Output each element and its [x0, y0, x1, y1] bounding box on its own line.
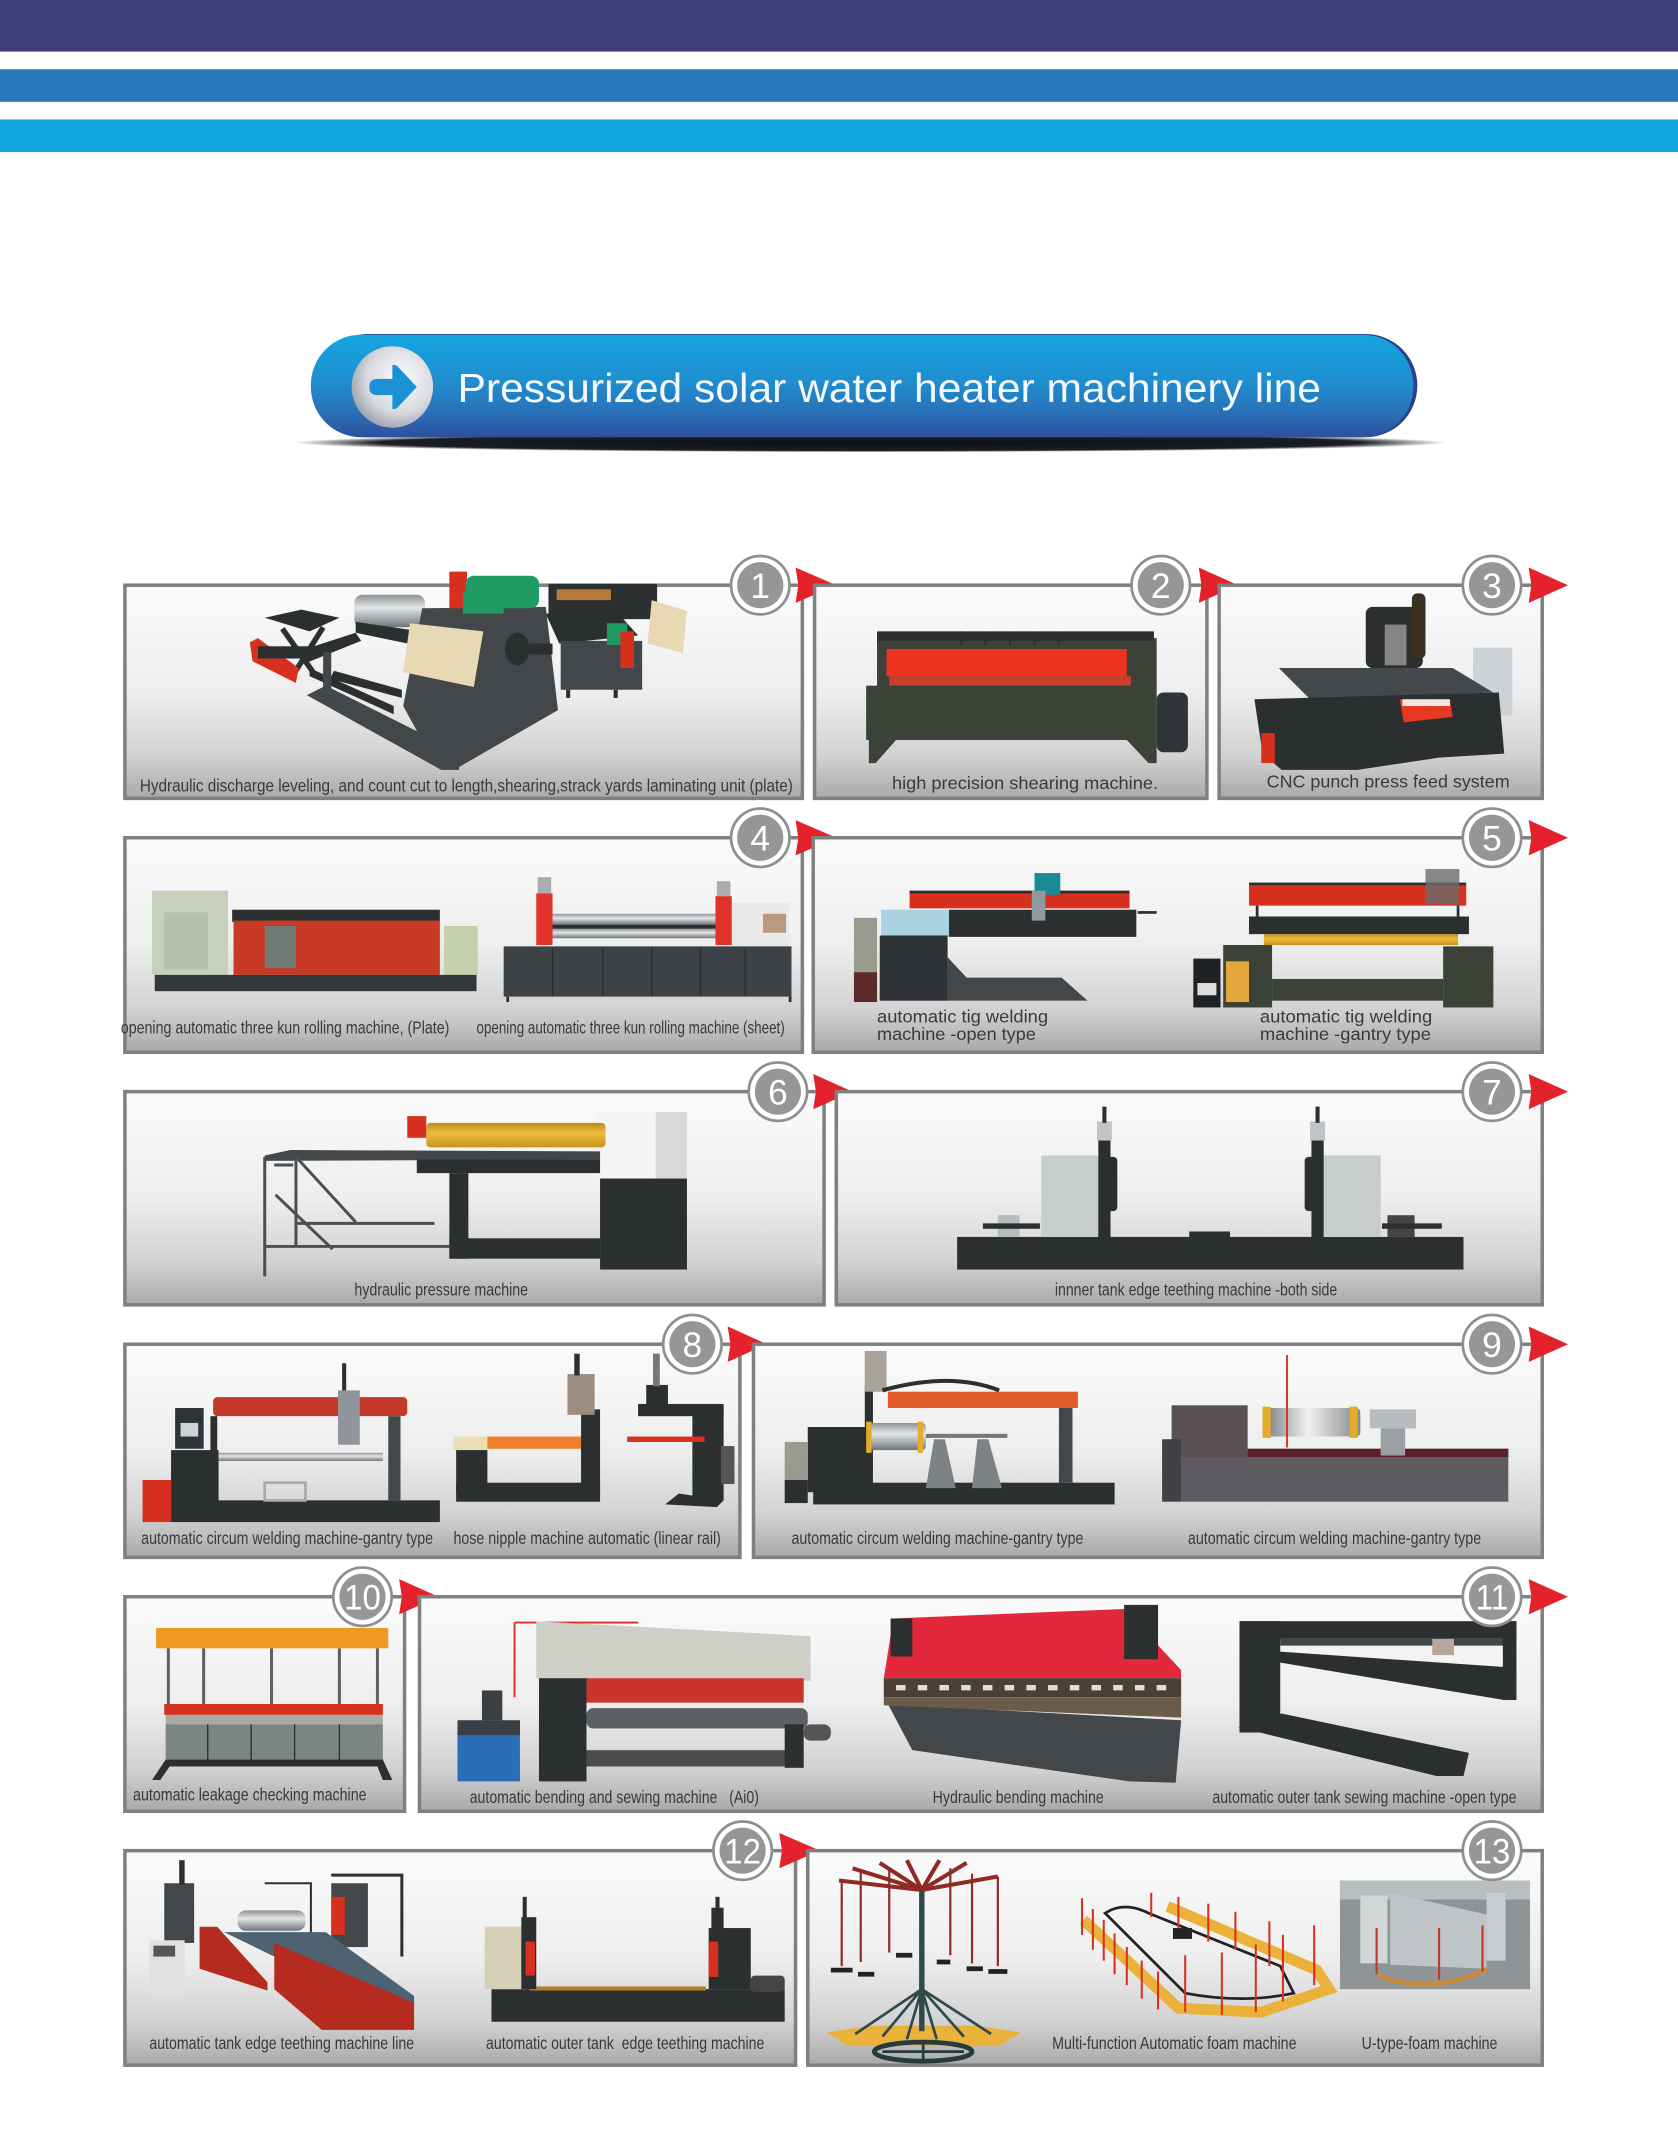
badge 3: [1463, 556, 1521, 614]
badge 9: [1463, 1315, 1521, 1373]
captions: automatic tank edge teething machine line: [149, 2033, 414, 2053]
badge 2: 2: [1151, 567, 1171, 606]
arrow: [399, 1579, 439, 1614]
captions: automatic tig welding: [1260, 1006, 1432, 1026]
arrow: [1529, 568, 1568, 603]
panel 3: [1219, 556, 1568, 798]
panel 13: [808, 1821, 1542, 2065]
captions: automatic circum welding machine-gantry type: [791, 1528, 1084, 1548]
panel 4: [121, 809, 836, 1052]
captions: [149, 2033, 764, 2053]
title text: Pressurized solar water heater machinery line: [458, 365, 1321, 411]
panel 9: [753, 1315, 1568, 1557]
icon: arrow in disc: [352, 346, 433, 428]
captions: automatic outer tank sewing machine -open type: [1212, 1787, 1517, 1807]
badge 9: 9: [1482, 1326, 1502, 1365]
badge 2: [1132, 556, 1190, 614]
captions: [141, 1528, 721, 1548]
arrow: [796, 820, 836, 855]
machine: oval foam track: [1082, 1893, 1329, 2015]
arrow: [1199, 568, 1238, 603]
machine: outer tank edge teething: [485, 1897, 785, 2022]
badge 11: 11: [1476, 1579, 1508, 1618]
machine: circum welding left: [785, 1351, 1115, 1504]
machine: tig welding gantry type: [1193, 869, 1493, 1007]
captions: automatic outer tank edge teething machine: [486, 2033, 764, 2053]
captions: machine -open type: [877, 1024, 1036, 1044]
caption: Hydraulic discharge leveling, and count cut to length,shearing,strack yards laminating unit (plate): [140, 776, 793, 796]
arrow: [1529, 1074, 1568, 1109]
arrow: [728, 1327, 767, 1362]
captions: opening automatic three kun rolling machine (sheet): [477, 1017, 785, 1037]
badge 4: 4: [750, 820, 770, 859]
panel 1: [125, 556, 836, 798]
machine: bending and sewing: [458, 1621, 831, 1781]
panel 6: [125, 1062, 853, 1305]
caption: CNC punch press feed system: [1267, 772, 1510, 792]
panel 10: [125, 1568, 439, 1811]
top header stripes: [0, 0, 1678, 152]
badge 5: [1463, 809, 1521, 867]
captions: automatic circum welding machine-gantry type: [1188, 1528, 1481, 1548]
machine: circum welding gantry: [143, 1363, 440, 1522]
captions: [1052, 2033, 1498, 2053]
badge 10: [333, 1568, 392, 1626]
machine: discharge leveling unit: [250, 572, 687, 770]
machine: circum welding right: [1162, 1355, 1508, 1502]
machine: rolling machine plate: [152, 891, 478, 991]
captions: automatic circum welding machine-gantry type: [141, 1528, 433, 1548]
badge 5: 5: [1482, 820, 1502, 859]
caption: high precision shearing machine.: [892, 773, 1158, 793]
captions: Hydraulic bending machine: [933, 1787, 1104, 1807]
machine: rolling machine sheet: [504, 877, 791, 1002]
panel 11: [420, 1568, 1568, 1811]
badge 3: 3: [1482, 567, 1502, 606]
machine: leakage checking: [152, 1628, 392, 1780]
badge 10: 10: [344, 1579, 381, 1618]
captions: [791, 1528, 1481, 1548]
badge 4: [731, 809, 789, 867]
captions: [470, 1787, 1517, 1807]
caption: innner tank edge teething machine -both side: [1055, 1279, 1337, 1299]
captions: Multi-function Automatic foam machine: [1052, 2033, 1297, 2053]
machine: hose nipple machines: [453, 1354, 734, 1507]
badge 1: [731, 556, 789, 614]
captions: machine -gantry type: [1260, 1024, 1431, 1044]
captions: [877, 1006, 1432, 1044]
captions: hose nipple machine automatic (linear rail): [453, 1528, 721, 1548]
panel 5: [813, 809, 1568, 1052]
badge 12: 12: [724, 1833, 761, 1872]
caption: hydraulic pressure machine: [354, 1279, 528, 1299]
caption: automatic leakage checking machine: [133, 1784, 367, 1804]
machine: tank edge teething line: [149, 1860, 414, 2030]
machine: shearing machine: [866, 631, 1188, 763]
captions: automatic bending and sewing machine (Ai0): [470, 1787, 759, 1807]
arrow: [779, 1833, 820, 1868]
badge 13: [1463, 1821, 1521, 1880]
machine: hydraulic pressure machine: [265, 1112, 687, 1276]
badge 8: 8: [683, 1326, 702, 1365]
captions: opening automatic three kun rolling machine, (Plate): [121, 1017, 449, 1037]
captions: automatic tig welding: [877, 1006, 1048, 1026]
machine: hydraulic bending: [884, 1605, 1181, 1783]
captions: U-type-foam machine: [1362, 2033, 1498, 2053]
photo: U-type foam machine: [1340, 1881, 1530, 1989]
badge 11: [1463, 1568, 1521, 1626]
captions: [121, 1017, 785, 1037]
machine: outer tank sewing: [1238, 1621, 1516, 1776]
arrow: [813, 1074, 853, 1109]
badge 7: 7: [1482, 1074, 1502, 1113]
arrow: [1529, 1579, 1568, 1614]
arrow: [796, 568, 836, 603]
machine: tig welding open type: [854, 873, 1157, 1002]
badge 6: [749, 1062, 807, 1121]
title banner: [293, 334, 1447, 452]
panel 7: [836, 1062, 1568, 1305]
badge 6: 6: [768, 1074, 788, 1113]
panel 2: [815, 556, 1238, 798]
badge 12: [713, 1821, 772, 1880]
panel 12: [125, 1821, 820, 2065]
machine: CNC punch press: [1254, 593, 1512, 770]
badge 7: [1463, 1062, 1521, 1121]
badge 1: 1: [750, 567, 770, 606]
badge 8: [663, 1315, 722, 1373]
badge 13: 13: [1474, 1833, 1510, 1872]
arrow: [1529, 820, 1568, 855]
machine: inner tank edge teething machine: [957, 1107, 1463, 1270]
panel 8: [125, 1315, 767, 1557]
machine: carousel foam rack: [827, 1860, 1021, 2061]
arrow: [1529, 1327, 1568, 1362]
